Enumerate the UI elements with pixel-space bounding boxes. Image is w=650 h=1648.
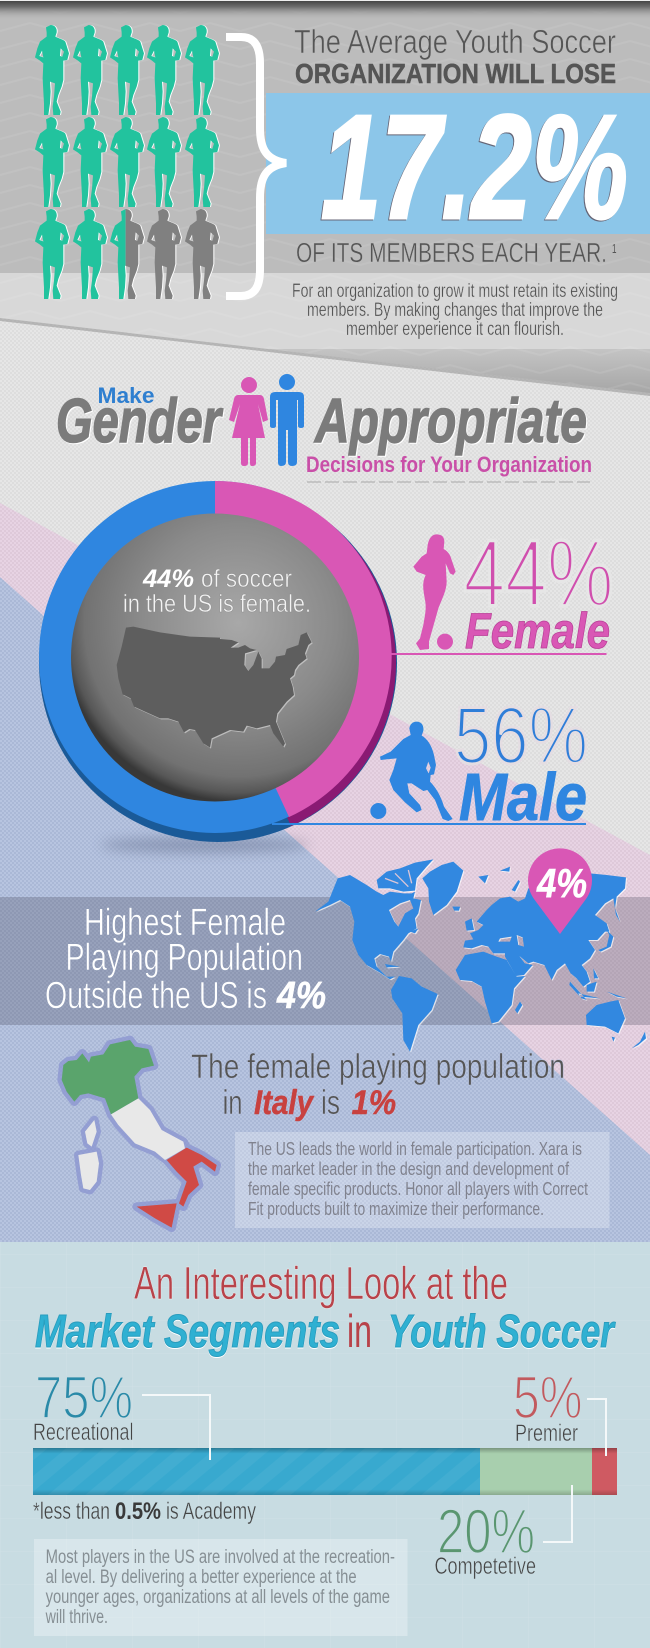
text: highest female playing population: Highest Female	[84, 902, 286, 944]
stat: recreational 75 percent: Recreational	[33, 1419, 134, 1446]
donut segment: female 44 percent	[215, 481, 392, 817]
stat: competitive 20 percent: 20%	[437, 1497, 535, 1567]
dashed rule	[307, 481, 590, 483]
text: 44 percent of soccer in the US: in the US is female.	[123, 590, 311, 618]
label: female: Female	[465, 603, 610, 659]
chart: gender donut	[39, 481, 397, 853]
connector	[142, 1395, 210, 1460]
number: 56 percent: 56%	[454, 691, 588, 781]
callout: recreational level: will thrive.	[45, 1607, 108, 1628]
note: academy share: 0.5%	[115, 1498, 161, 1525]
bar segment: recreational 75 percent	[33, 1448, 480, 1495]
callout: US leads the world: Fit products built to maximize their performance.	[248, 1199, 544, 1219]
note: academy share: is Academy	[166, 1498, 256, 1525]
italy red	[137, 1148, 217, 1228]
heading: make gender appropriate: Decisions for Your Organization	[306, 452, 592, 477]
icon grid: twenty player silhouettes	[35, 25, 220, 299]
heading: female population in Italy	[191, 1048, 565, 1122]
callout: recreational level	[34, 1539, 408, 1636]
callout: US leads the world: the market leader in the design and development of	[248, 1159, 570, 1179]
heading: market segments in youth soccer: Market Segments	[35, 1305, 340, 1357]
text: 44 percent of soccer in the US: 44%	[142, 565, 194, 593]
stat: recreational 75 percent: 75%	[35, 1364, 133, 1431]
map: world	[315, 848, 646, 1052]
map: contiguous USA	[117, 627, 313, 749]
background: fabric texture	[0, 300, 650, 1245]
number: 44 percent: 44%	[464, 521, 614, 627]
stat: recreational 75 percent	[33, 1364, 210, 1460]
bar segment: premier 5 percent	[592, 1448, 617, 1495]
label: male: Male	[459, 760, 587, 835]
text: highest female playing population: Playing Population	[66, 937, 303, 979]
eurasia and east asia	[453, 867, 627, 1000]
panel: dark highest-female band	[0, 897, 650, 1025]
stat: premier 5 percent: Premier	[515, 1420, 578, 1447]
africa and oceania	[456, 952, 646, 1048]
stat: premier 5 percent	[513, 1364, 606, 1456]
note: academy share: *less than	[33, 1498, 110, 1525]
heading: female population in Italy: is	[321, 1084, 340, 1122]
heading: market segments in youth soccer: An Interesting Look at the	[134, 1257, 508, 1309]
text: retention paragraph: member experience it can flourish.	[346, 319, 564, 340]
icon: man symbol	[270, 374, 304, 466]
callout: recreational level: Most players in the US are involved at the recreation-	[46, 1547, 395, 1568]
callout: US leads the world	[235, 1132, 610, 1228]
icon: female player	[413, 534, 456, 650]
background: blue diagonal field	[0, 577, 650, 1243]
text: 44 percent of soccer in the US: of soccer	[201, 565, 292, 593]
heading: make gender appropriate: Make	[98, 383, 154, 408]
chart: market segment bar	[33, 1448, 617, 1495]
heading: market segments in youth soccer	[35, 1257, 616, 1357]
text: highest female playing population	[45, 902, 326, 1017]
text: 44 percent of soccer in the US	[123, 565, 311, 618]
panel: market segments section	[0, 1242, 650, 1648]
panel: top retention section	[0, 0, 650, 396]
stat: 56 percent male	[272, 691, 588, 835]
heading: female population in Italy: 1%	[352, 1084, 396, 1122]
americas and greenland	[315, 859, 463, 1052]
donut centre disc	[71, 514, 359, 802]
bar segment: competitive 20 percent	[480, 1448, 592, 1495]
callout: recreational level: al level. By delivering a better experience at the	[46, 1567, 357, 1588]
stat: 44 percent female	[388, 521, 614, 659]
note: academy share	[33, 1498, 256, 1525]
heading: female population in Italy: The female playing population	[191, 1048, 565, 1086]
text: highest female playing population: Outside the US is	[45, 975, 267, 1017]
text: of its members each year: 1	[612, 241, 616, 256]
icon: white curly brace	[226, 37, 286, 296]
map pin: 4 percent	[528, 848, 592, 934]
callout: recreational level: younger ages, organizations at all levels of the game	[46, 1587, 390, 1608]
stat: competitive 20 percent: Competetive	[434, 1553, 536, 1580]
connector	[587, 1399, 606, 1456]
italy white	[78, 1098, 185, 1190]
icon: woman symbol	[229, 377, 268, 466]
background: middle fabric section	[0, 300, 650, 1250]
text: retention paragraph	[292, 281, 618, 340]
connector	[543, 1485, 572, 1542]
heading: female population in Italy: in	[223, 1084, 243, 1122]
heading: female population in Italy: Italy	[254, 1084, 315, 1122]
map: Italy in flag colours	[62, 1040, 217, 1228]
text: highest female playing population: 4%	[276, 975, 326, 1017]
heading: market segments in youth soccer: in	[347, 1305, 372, 1357]
stat: competitive 20 percent	[434, 1485, 572, 1580]
stat: premier 5 percent: 5%	[513, 1364, 582, 1431]
background: pink diagonal band	[0, 503, 650, 1243]
donut segment: male 56 percent	[39, 481, 391, 833]
heading: make gender appropriate: Gender	[56, 387, 223, 456]
panel: blue highlight band	[266, 93, 650, 234]
italy halo	[62, 1040, 217, 1228]
italy green	[62, 1040, 154, 1114]
heading: average youth soccer	[294, 23, 616, 89]
map pin: 4 percent: 4%	[536, 860, 587, 906]
icon: male player	[370, 722, 453, 821]
heading: make gender appropriate	[56, 383, 592, 477]
